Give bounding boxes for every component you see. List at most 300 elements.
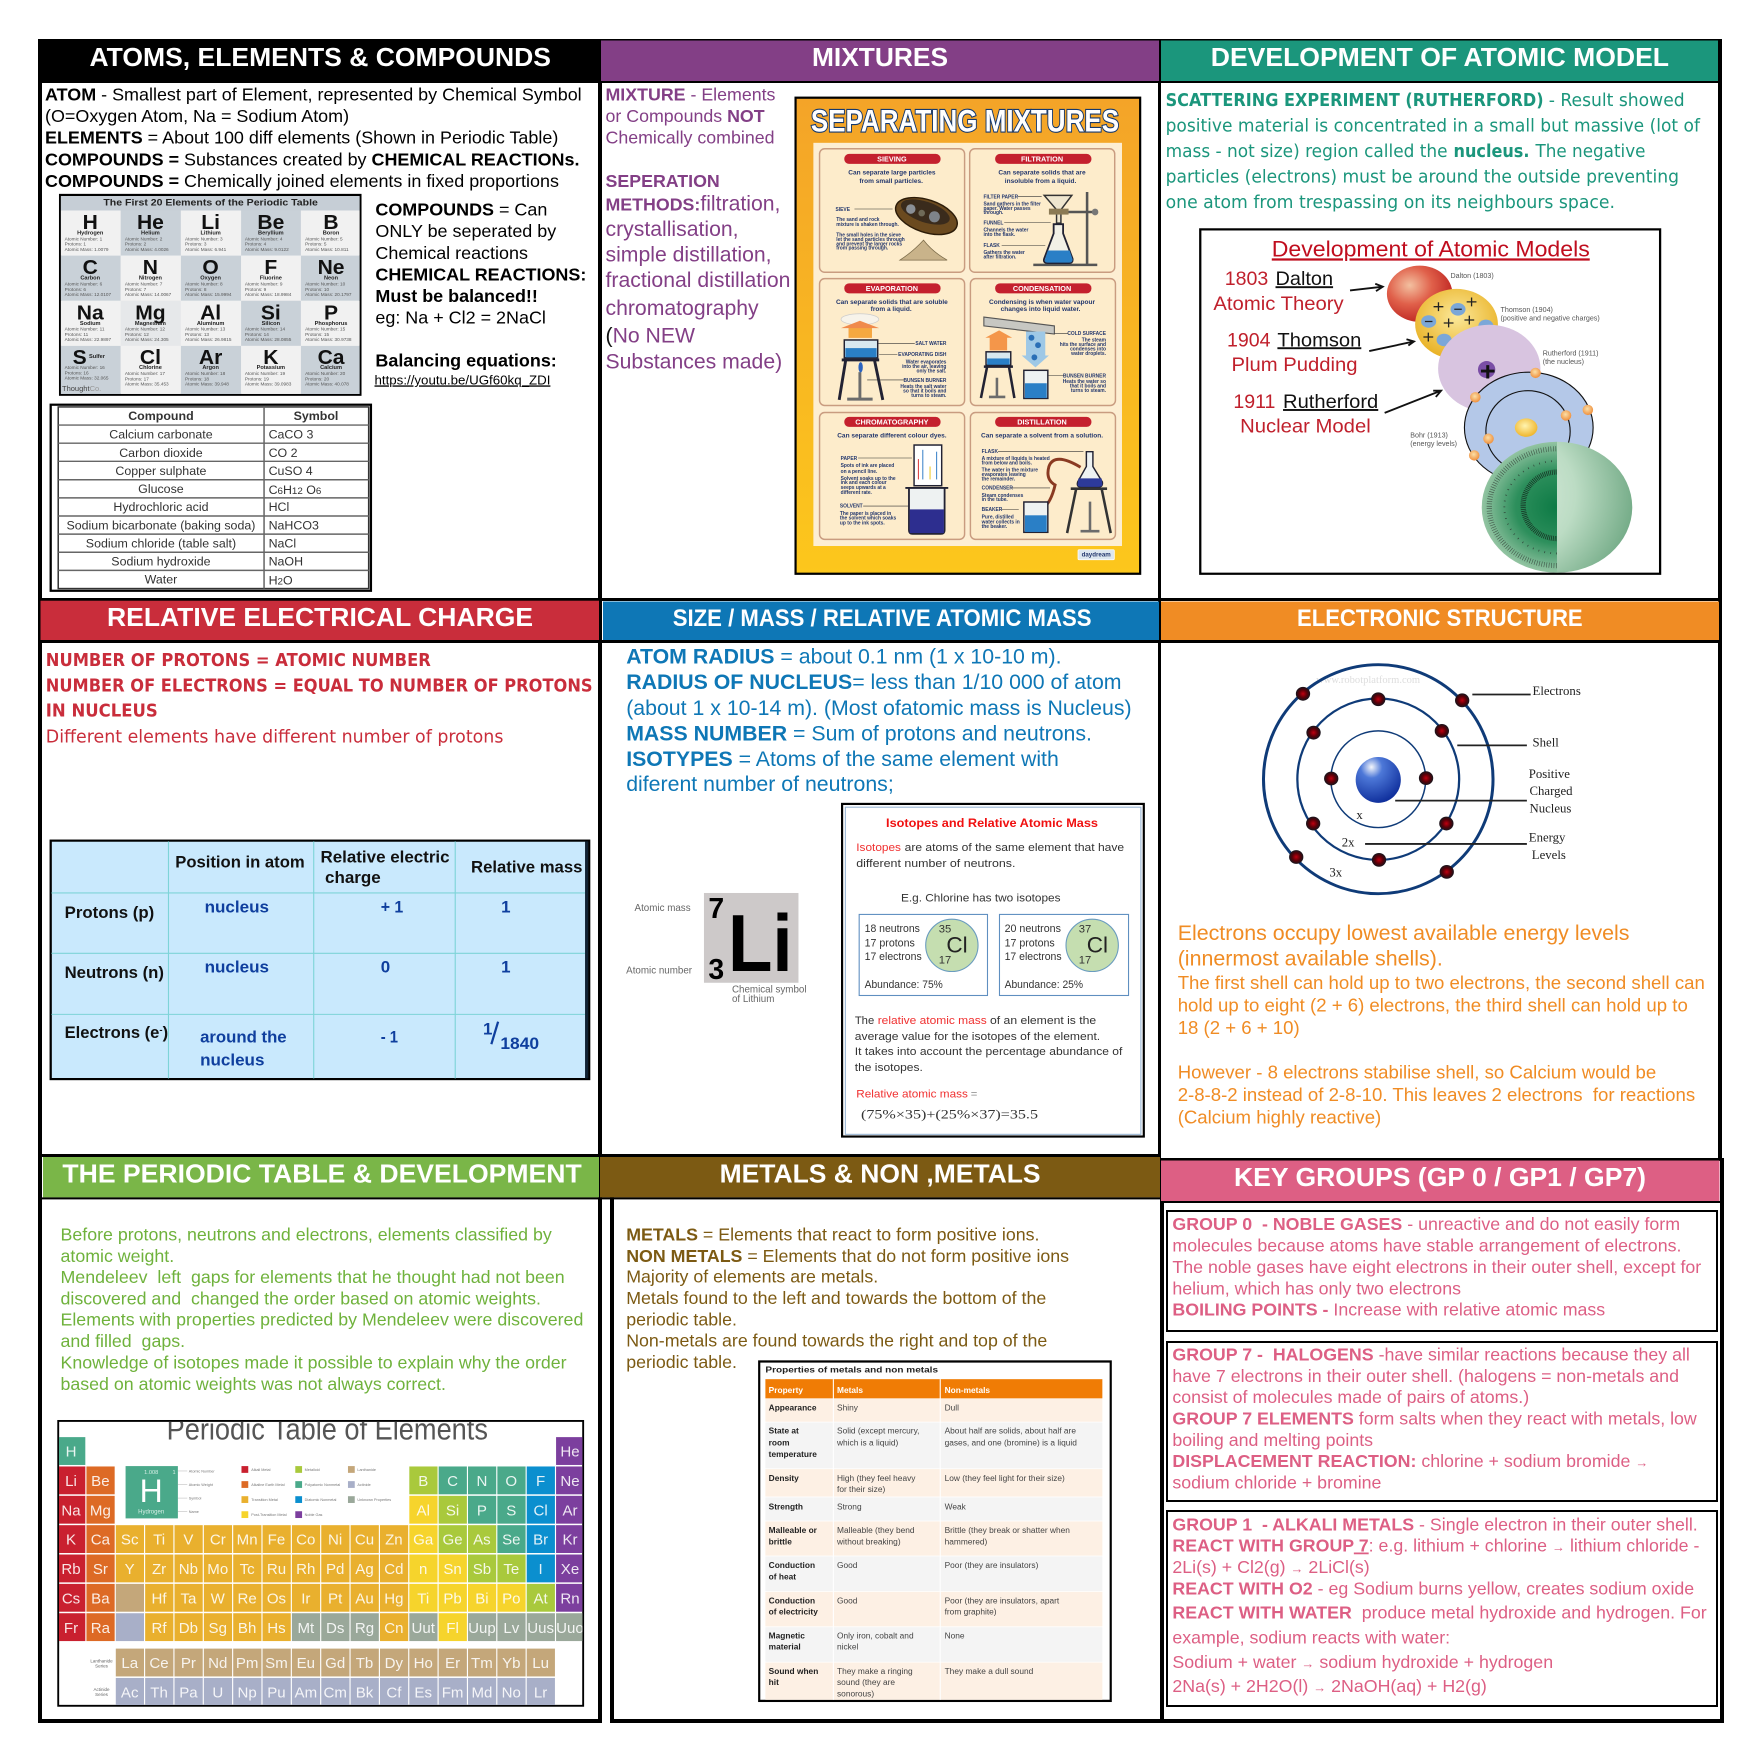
chart: first 20 elements of the periodic table: Atomic Mass: 24.305 xyxy=(125,337,169,342)
poster card: evaporation: from a liquid. xyxy=(871,306,912,313)
table: properties of metals and non metals: material xyxy=(769,1642,801,1652)
element cells: Ho xyxy=(414,1655,433,1672)
element cells: Tb xyxy=(356,1655,373,1672)
chart: first 20 elements of the periodic table: F xyxy=(264,256,277,279)
table: properties of metals and non metals: They make a ringing xyxy=(837,1666,913,1676)
chart: first 20 elements of the periodic table: Atomic Mass: 35.453 xyxy=(125,382,169,386)
element cells: Zn xyxy=(385,1532,403,1549)
element cells: Na xyxy=(61,1502,81,1519)
table: compounds and symbols: Hydrochloric acid xyxy=(113,500,209,514)
callout: group 7 halogens: GROUP 7 ELEMENTS form salts when they react with metals, low xyxy=(1172,1408,1697,1428)
text block: scattering experiment: SCATTERING EXPERIMENT (RUTHERFORD) xyxy=(1166,90,1544,111)
element cells: Po xyxy=(502,1590,520,1607)
element cells: Sg xyxy=(209,1620,227,1637)
table: subatomic particles: around the xyxy=(200,1028,287,1046)
poster card: filtration xyxy=(970,149,1115,272)
element cells: Cs xyxy=(62,1590,80,1607)
diagram: isotopes and relative atomic mass xyxy=(842,804,1144,1137)
chart: first 20 elements of the periodic table: Protons: 18 xyxy=(185,376,209,381)
isotope: chlorine 35 xyxy=(859,914,987,995)
chart: first 20 elements of the periodic table: Atomic Mass: 10.811 xyxy=(305,247,349,252)
element cells: Pu xyxy=(267,1685,286,1702)
element cells: Ne xyxy=(560,1473,580,1490)
poster card: chromatography: on a pencil line. xyxy=(841,469,878,475)
isotope: chlorine 35: 35 xyxy=(939,924,951,936)
relative atomic mass explanation: Relative atomic mass xyxy=(856,1089,968,1101)
diagram labels: Positive xyxy=(1529,767,1570,781)
table: subatomic particles: 1840 xyxy=(500,1034,539,1053)
chart: first 20 elements of the periodic table: Neon xyxy=(324,276,339,282)
heading: electronic structure xyxy=(1161,602,1719,640)
callout: group 7 halogens: consist of molecules made of pairs of atoms.) xyxy=(1172,1387,1529,1407)
element cells: Db xyxy=(179,1620,198,1637)
text block: Mendeleev history: Before protons, neutrons and electrons, elements classified by xyxy=(60,1224,552,1244)
legend key cell: 1 xyxy=(173,1470,176,1476)
isotope: chlorine 37 xyxy=(999,914,1129,995)
poster title: SEPARATING MIXTURES xyxy=(811,103,1119,139)
poster card: distillation: Pure, distilled xyxy=(982,514,1014,520)
text block: scattering experiment: particles (electrons) must be around the outside preventing xyxy=(1166,166,1679,187)
callout: group 7 halogens: boiling and melting points xyxy=(1172,1430,1373,1450)
element cells: C xyxy=(447,1473,458,1490)
table: compounds and symbols: NaOH xyxy=(269,555,303,569)
chart: first 20 elements of the periodic table: Argon xyxy=(202,365,220,371)
element cells: V xyxy=(183,1532,193,1549)
chart: first 20 elements of the periodic table: Atomic Number: 14 xyxy=(245,327,285,332)
text block: electron shells: (Calcium highly reactive) xyxy=(1178,1106,1381,1127)
panel: metals and non-metals xyxy=(600,1157,1160,1701)
table: subatomic particles: 1 xyxy=(501,898,511,917)
table: compounds and symbols: Compound xyxy=(128,409,194,423)
poster card: condensation: condenses into xyxy=(1070,346,1106,352)
element cells: Mt xyxy=(297,1620,315,1637)
isotope: chlorine 37: 17 xyxy=(1079,955,1091,967)
chart: first 20 elements of the periodic table: Hydrogen xyxy=(77,231,104,237)
table: compounds and symbols: NaCl xyxy=(269,537,296,550)
element cells: I xyxy=(539,1561,543,1578)
chart: first 20 elements of the periodic table: S xyxy=(73,346,87,369)
chart: periodic table of elements xyxy=(57,1414,584,1706)
table: subatomic particles: 1 xyxy=(483,1020,492,1038)
element cells: Cl xyxy=(534,1502,548,1519)
text block: Mendeleev history: atomic weight. xyxy=(60,1246,174,1266)
element cells: Cm xyxy=(323,1685,347,1702)
text block: atom definitions xyxy=(45,84,582,191)
chart: first 20 elements of the periodic table: Atomic Mass: 22.9897 xyxy=(65,337,111,342)
element cells: Rn xyxy=(560,1590,580,1607)
heading: atoms, elements and compounds: ATOMS, ELEMENTS & COMPOUNDS xyxy=(90,42,551,72)
poster card: condensation: Heats the water so xyxy=(1063,379,1106,385)
element cells: Mo xyxy=(207,1561,228,1578)
element cells: Mg xyxy=(90,1502,111,1519)
poster card: chromatography: the solvent which soaks xyxy=(840,516,896,522)
callout: group 7 halogens: have 7 electrons in their outer shell. (halogens = non-metals and xyxy=(1172,1366,1679,1386)
heading: metals and non metals: METALS & NON ,METALS xyxy=(720,1158,1041,1188)
element cells: Pm xyxy=(236,1655,258,1672)
chart: first 20 elements of the periodic table: Protons: 2 xyxy=(125,242,147,247)
table: properties of metals and non metals: temperature xyxy=(769,1449,817,1459)
table: subatomic particles: - xyxy=(159,1025,163,1036)
chart title: Periodic Table of Elements xyxy=(167,1414,488,1447)
text block: scattering experiment: nucleus. xyxy=(1454,141,1530,162)
legend swatches: Diatomic Nonmetal xyxy=(305,1498,337,1502)
poster card: distillation: evaporates leaving xyxy=(982,472,1026,478)
poster card: evaporation: Heats the salt water xyxy=(900,384,946,390)
element cells: U xyxy=(212,1685,223,1702)
poster card: distillation: Steam condenses xyxy=(982,493,1024,499)
chart: first 20 elements of the periodic table: Be xyxy=(257,211,284,234)
chart: first 20 elements of the periodic table: Protons: 3 xyxy=(185,242,207,247)
text block: compounds note: https://youtu.be/UGf60kq_ZDI xyxy=(374,372,550,387)
model: Thomson plum pudding xyxy=(1415,289,1498,359)
text block: scattering experiment xyxy=(1166,90,1701,213)
text block: compounds note: Balancing equations: xyxy=(375,351,557,371)
poster logo xyxy=(1078,550,1114,560)
element cells: Rf xyxy=(152,1620,167,1637)
isotopes definition: Isotopes xyxy=(856,842,901,854)
text block: scattering experiment: - Result showed xyxy=(1549,90,1685,111)
table: compounds and symbols: NaHCO3 xyxy=(269,518,319,532)
table: subatomic particles: Relative electric xyxy=(321,848,450,866)
poster card: evaporation: SALT WATER xyxy=(915,341,947,347)
chart: first 20 elements of the periodic table: O xyxy=(202,256,219,279)
text block: mixture definition and separation methods: METHODS:filtration, xyxy=(606,192,780,216)
legend swatches: Unknown Properties xyxy=(357,1498,391,1502)
text block: mixture definition and separation methods: (No NEW xyxy=(606,325,695,348)
poster card: evaporation: so that it boils and xyxy=(903,388,946,395)
chart: first 20 elements of the periodic table: Atomic Mass: 39.948 xyxy=(185,382,229,386)
legend key cell: Atomic Number xyxy=(189,1469,215,1473)
legend key cell: 1.008 xyxy=(144,1470,158,1476)
panel: size, mass and relative atomic mass xyxy=(603,602,1159,1137)
element cells: Sc xyxy=(121,1532,139,1549)
heading: the periodic table and development: THE PERIODIC TABLE & DEVELOPMENT xyxy=(62,1158,582,1188)
table: properties of metals and non metals: of heat xyxy=(769,1571,796,1581)
element cells: Eu xyxy=(297,1655,315,1672)
poster card: sieving: from passing through. xyxy=(836,246,889,252)
chart: first 20 elements of the periodic table: Si xyxy=(261,301,281,324)
poster card: distillation: A mixture of liquids is heated xyxy=(982,456,1050,462)
element cells: B xyxy=(418,1473,428,1490)
poster card: condensation: Condensing is when water vapour xyxy=(989,299,1095,306)
element cells: n xyxy=(419,1561,427,1578)
model captions: Thomson (1904) xyxy=(1501,306,1553,314)
diagram: lithium element cell: Atomic number xyxy=(626,966,693,977)
table: subatomic particles: Protons (p) xyxy=(65,903,154,922)
element cells: Sn xyxy=(443,1561,462,1578)
diagram: atom shells xyxy=(1263,665,1581,894)
legend swatches: Alkali Metal xyxy=(251,1468,271,1472)
element cells: Cd xyxy=(384,1561,404,1578)
chart: first 20 elements of the periodic table: P xyxy=(324,301,338,324)
diagram labels: 2x xyxy=(1342,836,1355,849)
table: properties of metals and non metals: Shiny xyxy=(837,1402,859,1412)
text block: Mendeleev history: based on atomic weights was not always correct. xyxy=(60,1374,446,1394)
legend swatches: Post-Transition Metal xyxy=(251,1513,287,1517)
table: properties of metals and non metals: Low (they feel light for their size) xyxy=(945,1473,1065,1483)
callout: group 1 alkali metals: GROUP 1 - ALKALI METALS - Single electron in their outer shell. xyxy=(1172,1514,1698,1534)
table: subatomic particles: Relative mass xyxy=(471,858,582,877)
callout: group 7 halogens: DISPLACEMENT REACTION: chlorine + sodium bromide → xyxy=(1172,1451,1648,1471)
element cells: Er xyxy=(445,1655,460,1672)
chart: first 20 elements of the periodic table: Atomic Number: 5 xyxy=(305,237,343,241)
heading: development of atomic model: DEVELOPMENT OF ATOMIC MODEL xyxy=(1211,42,1669,72)
text block: metals definitions: Metals found to the left and towards the bottom of the xyxy=(626,1288,1046,1308)
series labels xyxy=(90,1659,113,1697)
poster card: evaporation: into the air, leaving xyxy=(902,364,946,370)
text block: scattering experiment: positive material is concentrated in a small but massive (lot of xyxy=(1166,115,1701,136)
element cells: Xe xyxy=(561,1561,579,1578)
element cells: Dy xyxy=(385,1655,404,1672)
element cells: O xyxy=(505,1473,517,1490)
text block: protons and electrons: Different elements have different number of protons xyxy=(46,726,503,747)
diagram: atom shells: www.robotplatform.com xyxy=(1316,675,1420,686)
legend swatches: Lanthanide xyxy=(357,1468,376,1472)
element cells: Ar xyxy=(562,1502,578,1519)
table: properties of metals and non metals: Weak xyxy=(945,1501,967,1511)
table: properties of metals and non metals: Conduction xyxy=(769,1595,815,1605)
panel: the periodic table and development xyxy=(40,1157,600,1706)
text block: atom radius and isotopes xyxy=(626,645,1132,796)
poster card: filtration: paper. Water passes xyxy=(983,206,1031,212)
poster card: filtration: Channels the water xyxy=(983,228,1028,234)
element cells: Pt xyxy=(328,1590,343,1607)
model captions xyxy=(1410,272,1600,448)
table: properties of metals and non metals: Properties of metals and non metals xyxy=(765,1364,938,1374)
poster card: sieving: and prevent the larger rocks xyxy=(836,241,902,247)
poster card: distillation: the beaker. xyxy=(982,524,1008,530)
table: subatomic particles xyxy=(51,841,589,1079)
table: subatomic particles: 0 xyxy=(381,958,390,977)
heading: relative electrical charge: RELATIVE ELECTRICAL CHARGE xyxy=(107,602,533,632)
legend swatches: Actinide xyxy=(357,1483,371,1487)
text block: metals definitions: periodic table. xyxy=(626,1309,737,1329)
table: subatomic particles: 1 xyxy=(501,958,511,977)
element cells: Ba xyxy=(91,1590,110,1607)
heading: electronic structure: ELECTRONIC STRUCTURE xyxy=(1297,605,1583,632)
poster card: distillation: The water in the mixture xyxy=(982,468,1038,474)
text block: mixture definition and separation methods: fractional distillation xyxy=(606,269,790,292)
callout: group 0 noble gases xyxy=(1167,1211,1717,1331)
model: Bohr energy levels xyxy=(1464,368,1593,483)
poster card: sieving: Can separate large particles xyxy=(848,170,936,177)
table: compounds and symbols: Copper sulphate xyxy=(115,464,207,478)
poster card: condensation: that it boils and xyxy=(1070,384,1106,390)
poster logo: daydream xyxy=(1082,552,1111,559)
arrows xyxy=(1350,284,1441,413)
element cells: Ni xyxy=(328,1532,342,1549)
element cells: Sm xyxy=(265,1655,288,1672)
element cells: Be xyxy=(91,1473,110,1490)
diagram labels: Electrons xyxy=(1533,684,1581,698)
element cells: Y xyxy=(125,1561,135,1578)
chart: first 20 elements of the periodic table: Ca xyxy=(318,346,345,369)
text block: electron shells: hold up to eight (2 + 6) electrons, the third shell can hold up to xyxy=(1178,994,1688,1016)
chart: first 20 elements of the periodic table: Protons: 8 xyxy=(185,287,207,292)
chart: first 20 elements of the periodic table: H xyxy=(83,211,98,234)
chart: first 20 elements of the periodic table: Na xyxy=(77,301,104,324)
isotope: chlorine 37: Cl xyxy=(1087,933,1108,958)
chart: first 20 elements of the periodic table: N xyxy=(143,256,158,279)
callout: group 0 noble gases: GROUP 0 - NOBLE GASES - unreactive and do not easily form xyxy=(1172,1214,1680,1234)
text block: electron shells: 18 (2 + 6 + 10) xyxy=(1178,1017,1300,1038)
callout: group 7 halogens: GROUP 7 - HALOGENS -have similar reactions because they all xyxy=(1172,1344,1690,1364)
element cells: Yb xyxy=(502,1655,520,1672)
chart: first 20 elements of the periodic table: Protons: 12 xyxy=(125,332,149,337)
table: properties of metals and non metals: About half are solids, about half are xyxy=(945,1426,1076,1436)
table: properties of metals and non metals: Density xyxy=(769,1473,799,1483)
table: compounds and symbols: HCl xyxy=(269,500,289,514)
text block: electron shells: Electrons occupy lowest available energy levels xyxy=(1178,921,1630,945)
text block: atom radius and isotopes: ISOTYPES = Atoms of the same element with xyxy=(626,747,1059,771)
element cells: Cn xyxy=(384,1620,404,1637)
element cells: Lv xyxy=(503,1620,520,1637)
heading: size, mass, relative atomic mass: SIZE / MASS / RELATIVE ATOMIC MASS xyxy=(673,605,1092,632)
element cells: Ca xyxy=(91,1532,111,1549)
table: subatomic particles: nucleus xyxy=(205,958,269,977)
chart: first 20 elements of the periodic table: Atomic Mass: 6.941 xyxy=(185,247,227,252)
text block: mixture definition and separation methods xyxy=(606,84,790,374)
text block: metals definitions: Majority of elements are metals. xyxy=(626,1266,878,1286)
chart: first 20 elements of the periodic table: Atomic Mass: 20.1797 xyxy=(305,292,352,297)
panel: relative electrical charge xyxy=(40,601,599,1079)
table: properties of metals and non metals: They make a dull sound xyxy=(945,1666,1034,1676)
chart: first 20 elements of the periodic table: Magnesium xyxy=(135,321,166,327)
chart: first 20 elements of the periodic table: Ar xyxy=(199,346,222,369)
poster card: filtration: FLASK xyxy=(983,243,1000,249)
legend swatches: Polyatomic Nonmetal xyxy=(305,1483,340,1487)
chart: first 20 elements of the periodic table: Nitrogen xyxy=(139,276,163,282)
poster card: sieving: SIEVING xyxy=(877,154,907,163)
text block: Mendeleev history: Elements with properties predicted by Mendeleev were discovered xyxy=(60,1310,583,1330)
chart: first 20 elements of the periodic table: Sulfer xyxy=(89,354,106,360)
chart: first 20 elements of the periodic table: Calcium xyxy=(320,365,342,371)
element cells: Am xyxy=(295,1685,317,1702)
timeline labels: Dalton xyxy=(1276,268,1333,290)
chart: first 20 elements of the periodic table: Atomic Mass: 12.0107 xyxy=(65,292,111,297)
chart: first 20 elements of the periodic table: Mg xyxy=(135,301,166,324)
timeline labels: Rutherford xyxy=(1283,391,1378,413)
text block: atom radius and isotopes: diferent number of neutrons; xyxy=(626,772,894,796)
text block: compounds note: COMPOUNDS = Can xyxy=(375,200,547,220)
diagram labels: Levels xyxy=(1532,848,1566,862)
poster card: condensation: turns to steam. xyxy=(1071,388,1107,394)
chart: first 20 elements of the periodic table xyxy=(60,195,360,395)
text block: atom radius and isotopes: ATOM RADIUS = about 0.1 nm (1 x 10-10 m). xyxy=(626,645,1062,669)
element cells: Ir xyxy=(301,1590,310,1607)
series labels: Lanthanide xyxy=(90,1659,113,1664)
table: properties of metals and non metals: Poor (they are insulators, apart xyxy=(945,1595,1060,1605)
chart: first 20 elements of the periodic table: Protons: 14 xyxy=(245,332,269,337)
table: compounds and symbols: Symbol xyxy=(294,409,338,423)
poster card: chromatography: Spots of ink are placed xyxy=(841,463,894,469)
poster card: condensation: CONDENSATION xyxy=(1013,284,1071,293)
text block: Mendeleev history: discovered and changed the order based on atomic weights. xyxy=(60,1288,541,1308)
table: properties of metals and non metals: State at xyxy=(769,1426,799,1436)
isotope: chlorine 37: 17 protons xyxy=(1005,937,1055,949)
element cells: Pd xyxy=(326,1561,344,1578)
table: properties of metals and non metals: from graphite) xyxy=(945,1607,997,1617)
table: compounds and symbols: CuSO 4 xyxy=(269,464,313,478)
callout: group 1 alkali metals: 2Li(s) + Cl2(g) → 2LiCl(s) xyxy=(1172,1557,1370,1577)
callout: group 1 alkali metals xyxy=(1167,1511,1717,1706)
poster card: condensation: The steam xyxy=(1082,337,1107,343)
heading: the periodic table and development xyxy=(43,1157,599,1197)
heading: size, mass, relative atomic mass xyxy=(603,602,1159,640)
table: compounds and symbols: H2O xyxy=(269,574,293,587)
poster card: condensation xyxy=(970,279,1115,405)
element cells: Sr xyxy=(93,1561,108,1578)
chart: first 20 elements of the periodic table: Atomic Number: 17 xyxy=(125,371,165,376)
text block: atom definitions: COMPOUNDS = Substances created by CHEMICAL REACTIONs. xyxy=(45,149,579,169)
legend key cell: Symbol xyxy=(189,1497,201,1501)
diagram labels: Charged xyxy=(1530,784,1573,798)
text block: compounds note xyxy=(374,200,586,387)
chart: first 20 elements of the periodic table: Atomic Number: 15 xyxy=(305,327,346,332)
element cells: Gd xyxy=(325,1655,345,1672)
text block: atom radius and isotopes: (about 1 x 10-14 m). (Most ofatomic mass is Nucleus) xyxy=(626,696,1132,720)
element cells: N xyxy=(476,1473,487,1490)
poster card: chromatography xyxy=(820,412,965,539)
element cells: Co xyxy=(296,1532,315,1549)
chart: first 20 elements of the periodic table: Protons: 5 xyxy=(305,242,327,247)
table: compounds and symbols: Water xyxy=(145,573,177,587)
table: properties of metals and non metals: Malleable (they bend xyxy=(837,1525,915,1535)
callout: group 0 noble gases: The noble gases have eight electrons in their outer shell, except for xyxy=(1172,1257,1701,1277)
text block: protons and electrons: NUMBER OF PROTONS = ATOMIC NUMBER xyxy=(46,650,431,671)
poster card: filtration: through. xyxy=(983,210,1004,216)
table: properties of metals and non metals: Property xyxy=(769,1385,803,1395)
table: compounds and symbols: C6H12 O6 xyxy=(269,483,321,497)
poster card: chromatography: Can separate different colour dyes. xyxy=(837,432,947,439)
callout: group 7 halogens xyxy=(1167,1342,1717,1501)
table: compounds and symbols: Glucose xyxy=(138,482,184,496)
isotope: chlorine 37: Abundance: 25% xyxy=(1005,979,1083,991)
diagram labels: 3x xyxy=(1329,865,1343,879)
isotope: chlorine 35: 17 protons xyxy=(865,937,915,949)
table: properties of metals and non metals: Magnetic xyxy=(769,1630,805,1640)
table: properties of metals and non metals: High (they feel heavy xyxy=(837,1473,916,1483)
poster card: distillation: Can separate a solvent from a solution. xyxy=(981,432,1103,439)
element cells: Kr xyxy=(562,1532,578,1549)
text block: metals definitions: Non-metals are found towards the right and top of the xyxy=(626,1330,1047,1350)
table: properties of metals and non metals: Conduction xyxy=(769,1560,815,1570)
element cells: Uuo xyxy=(556,1620,584,1637)
poster card: chromatography: The paper is placed in xyxy=(840,511,891,517)
element cells: Md xyxy=(471,1685,492,1702)
poster card: sieving: The sand and rock xyxy=(836,217,880,223)
element cells: Ce xyxy=(149,1655,169,1672)
callout: group 1 alkali metals: Sodium + water → sodium hydroxide + hydrogen xyxy=(1172,1652,1553,1672)
poster card: chromatography: seeps upwards at a xyxy=(841,485,886,491)
poster card: sieving xyxy=(820,149,965,272)
isotope: chlorine 35: Cl xyxy=(946,933,968,958)
element cells: Sb xyxy=(473,1561,491,1578)
poster card: evaporation: BUNSEN BURNER xyxy=(903,378,947,384)
chart: first 20 elements of the periodic table: Atomic Mass: 39.0983 xyxy=(245,382,292,386)
chart: first 20 elements of the periodic table: Atomic Mass: 28.0855 xyxy=(245,337,292,342)
element cells: Uus xyxy=(527,1620,554,1637)
text block: atom definitions: ELEMENTS = About 100 diff elements (Shown in Periodic Table) xyxy=(45,128,558,148)
poster card: condensation: BUNSEN BURNER xyxy=(1063,373,1106,379)
model: modern cloud sphere xyxy=(1482,442,1632,573)
table: subatomic particles: - 1 xyxy=(381,1028,398,1046)
table: subatomic particles: Electrons (e xyxy=(65,1023,161,1042)
element cells: Cr xyxy=(210,1532,226,1549)
relative atomic mass explanation xyxy=(855,1015,1123,1101)
text block: compounds note: Chemical reactions xyxy=(375,243,528,263)
element cells: Ti xyxy=(417,1590,429,1607)
